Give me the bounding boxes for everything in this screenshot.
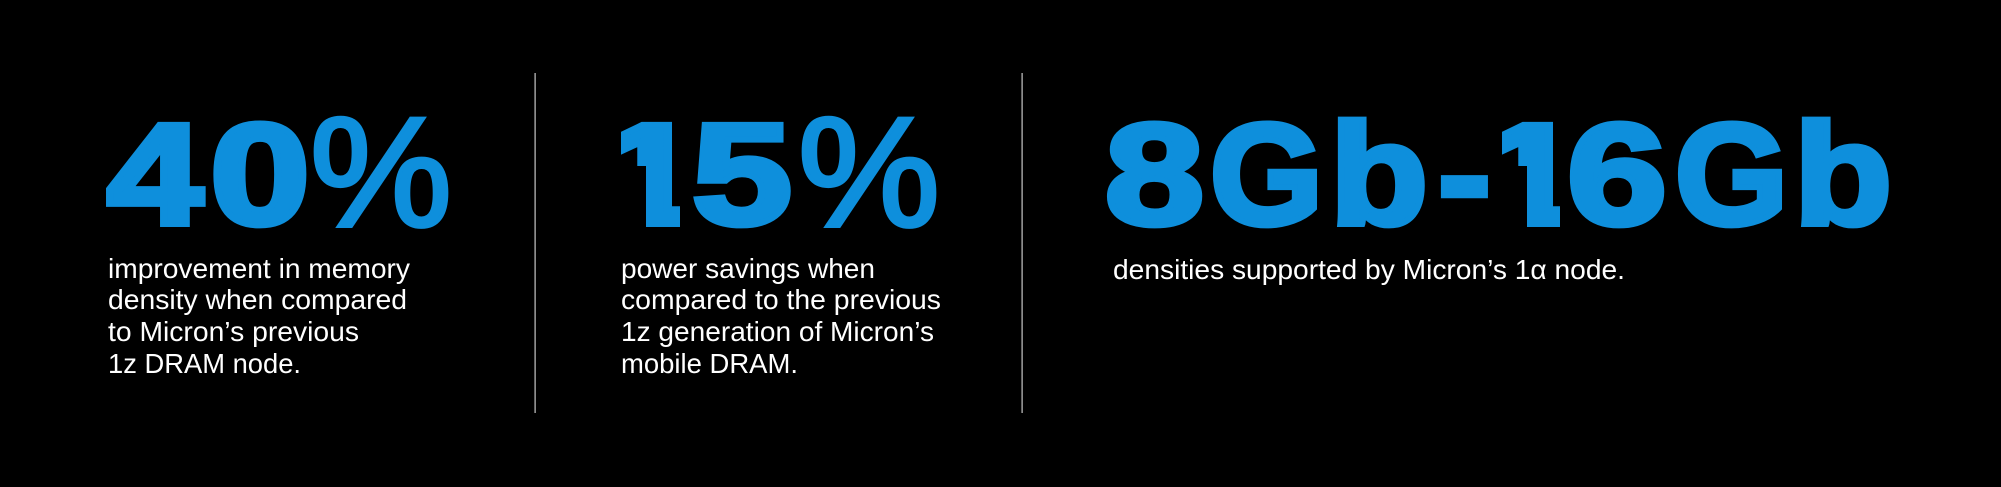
caption: power savings: power savings when	[621, 253, 875, 284]
stat: 8Gb-16Gb: G	[1675, 94, 1788, 255]
stat: 15%: 1	[596, 94, 704, 255]
stat: 15%: %	[798, 86, 940, 260]
stat: 40%: 0	[210, 94, 310, 255]
panel: densities	[1105, 94, 1892, 285]
stat: 40%: 4	[107, 94, 203, 255]
caption: densities supported: densities supported by Micron’s 1α node.	[1113, 254, 1625, 285]
caption: power savings: 1z generation of Micron’s	[621, 316, 934, 347]
stat: 8Gb-16Gb	[1105, 94, 1892, 255]
stat: 15%: 5	[692, 94, 792, 255]
stat: 8Gb-16Gb: -	[1438, 94, 1491, 255]
stat: 40%	[107, 86, 452, 260]
caption: density improvement: 1z DRAM node.	[108, 348, 301, 379]
panel: 40% density	[107, 86, 452, 379]
panel: 15% power	[590, 86, 941, 379]
stat: 40%: %	[310, 86, 452, 260]
stat: 8Gb-16Gb: 6	[1567, 94, 1667, 255]
caption: density improvement: density when compared	[108, 284, 407, 315]
divider 2	[1022, 73, 1023, 413]
stat: 8Gb-16Gb: b	[1794, 94, 1892, 255]
stat: 8Gb-16Gb: G	[1210, 94, 1323, 255]
caption: density improvement: to Micron’s previous	[108, 316, 359, 347]
stat: 8Gb-16Gb: 8	[1105, 94, 1204, 255]
stat: 15%	[590, 86, 940, 260]
stat: 8Gb-16Gb: 1	[1477, 94, 1585, 255]
caption: power savings	[621, 253, 941, 379]
caption: density improvement: improvement in memory	[108, 253, 410, 284]
caption: power savings: mobile DRAM.	[621, 348, 798, 379]
divider 1	[534, 73, 536, 413]
caption: power savings: compared to the previous	[621, 284, 941, 315]
stat: 8Gb-16Gb: b	[1330, 94, 1428, 255]
caption: density improvement	[108, 253, 410, 379]
